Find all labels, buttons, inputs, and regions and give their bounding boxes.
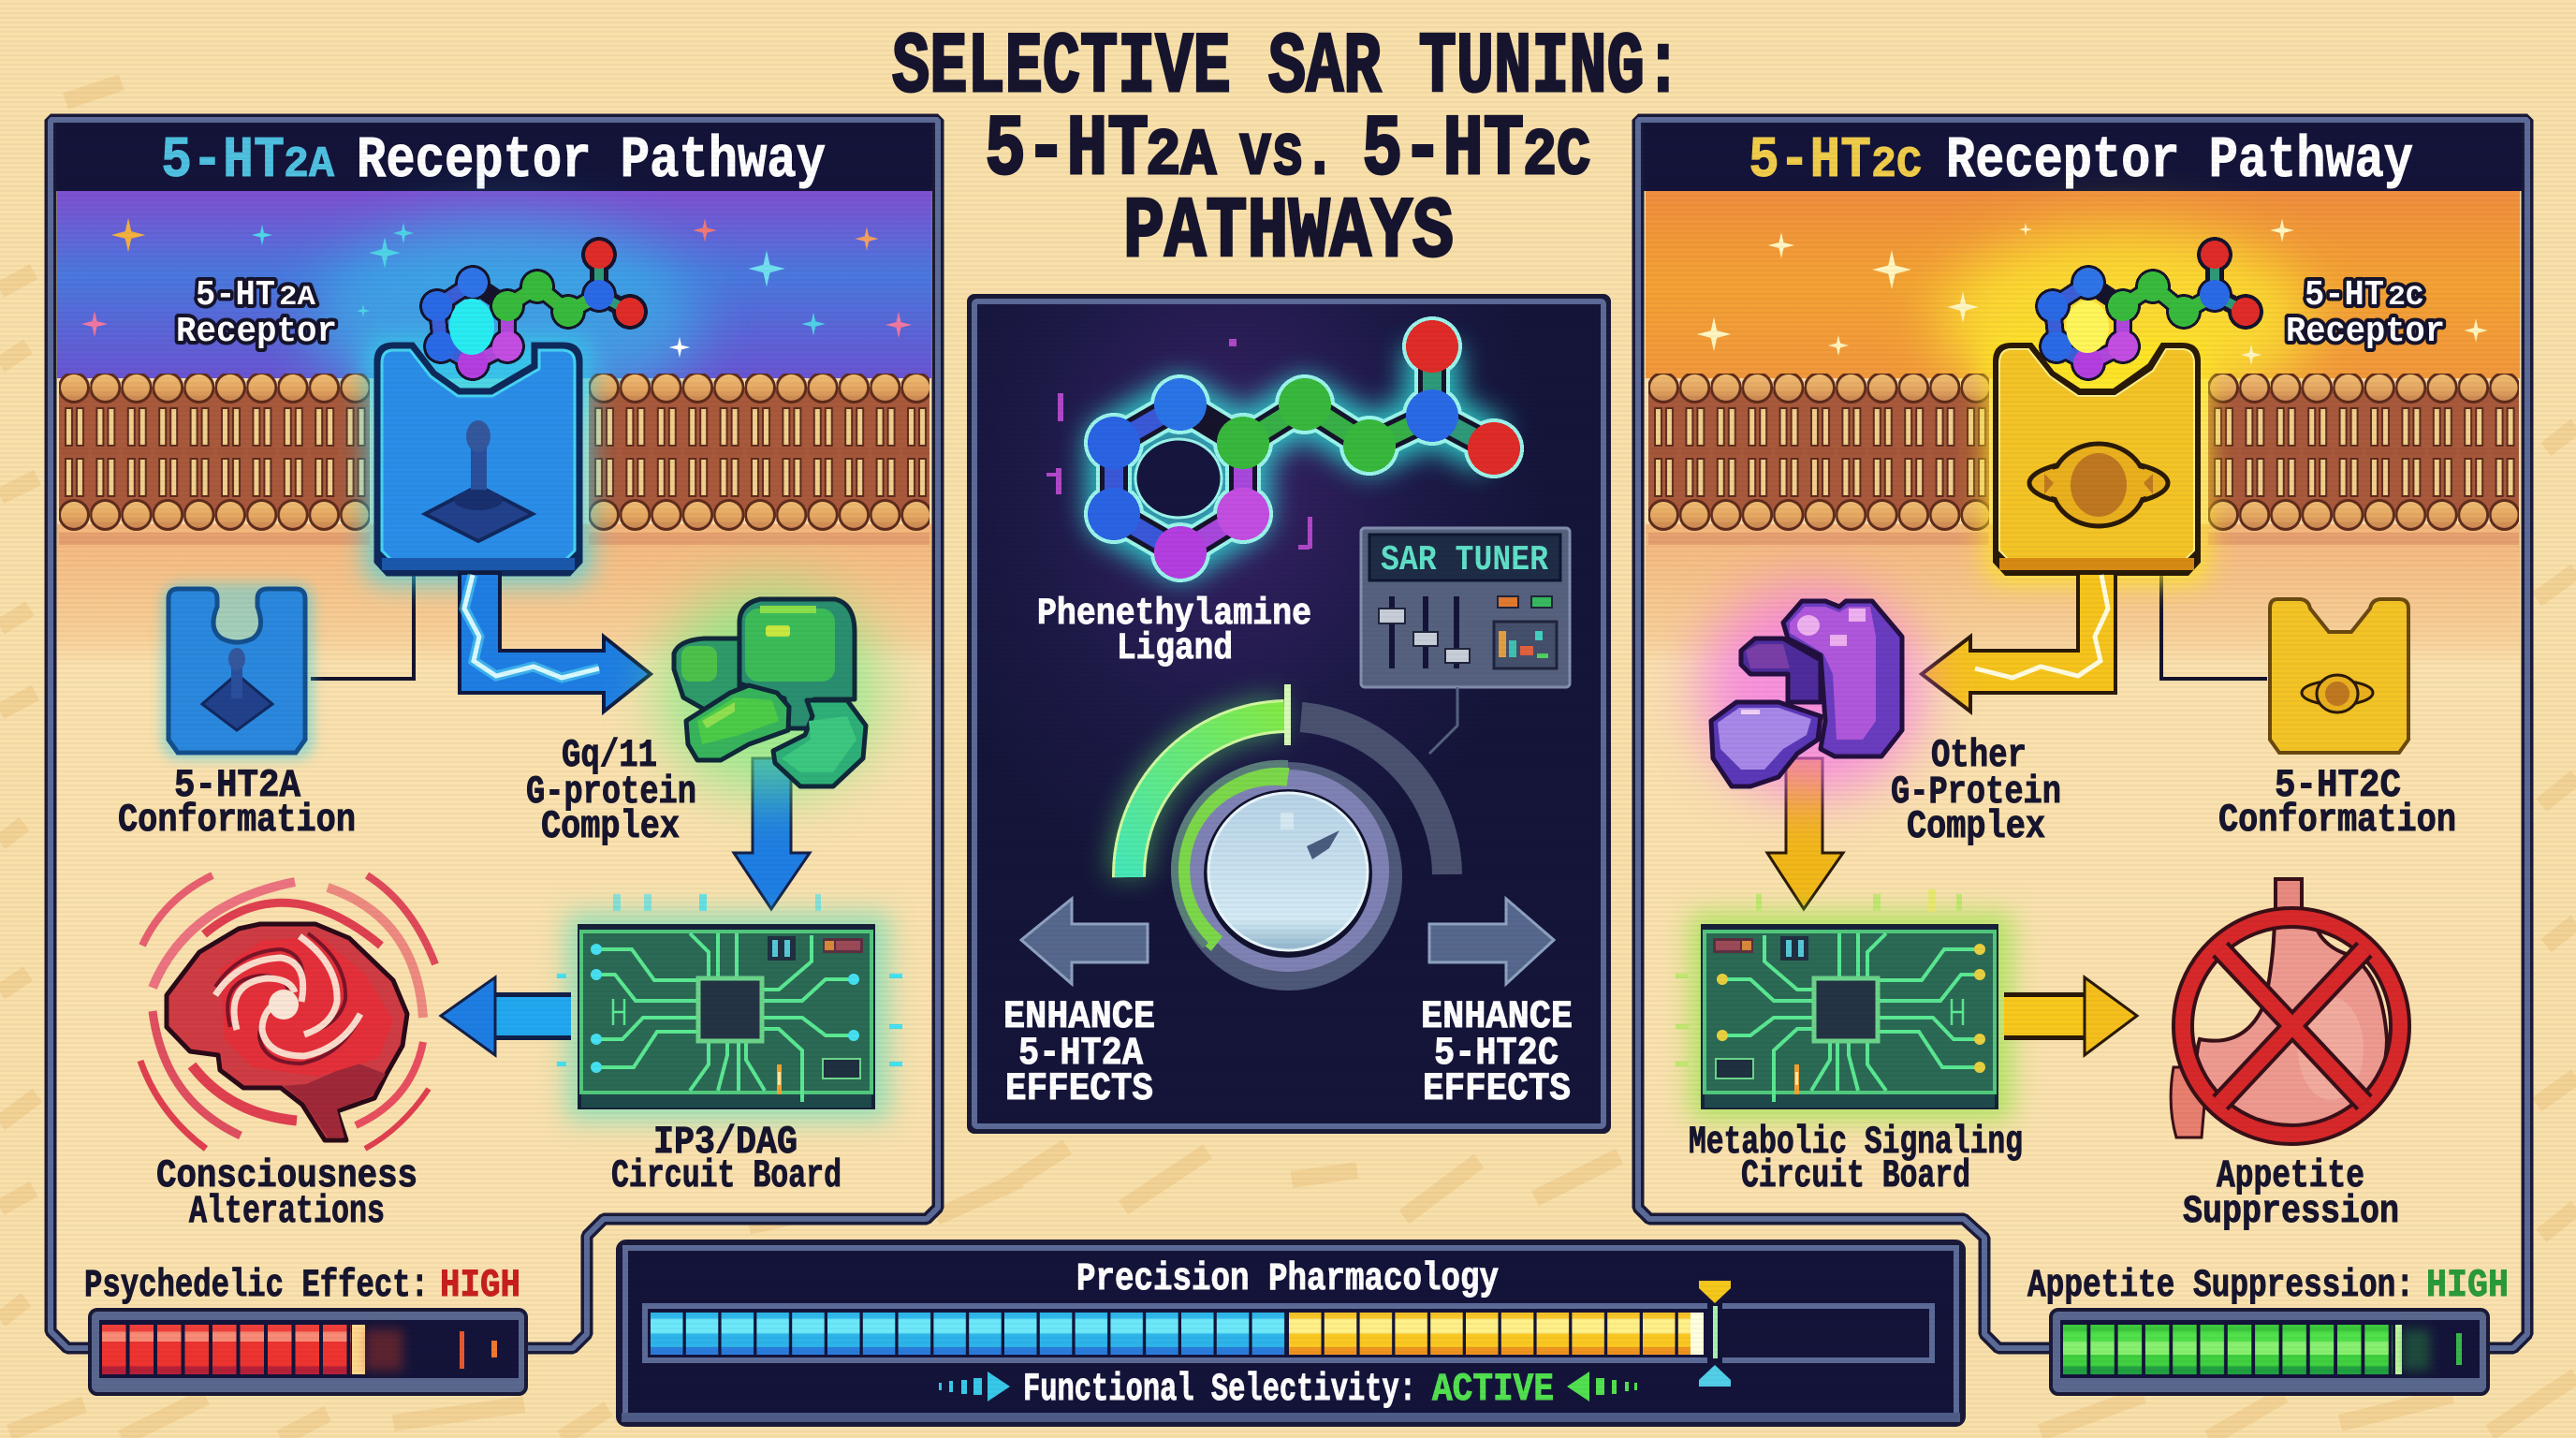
label: G-protein	[1891, 733, 2061, 849]
label: functional selectivity: Functional Selectivity:	[1023, 1367, 1416, 1412]
label: G-protein	[526, 733, 696, 849]
title: PATHWAYS	[1123, 183, 1454, 282]
arrow: down to circuit board	[734, 758, 810, 909]
arrow: enhance 5-HT2A	[1021, 899, 1148, 984]
label: consciousness: Consciousness	[156, 1153, 417, 1198]
label: circuit board: IP3/DAG	[653, 1120, 798, 1165]
panel: precision pharmacology	[619, 1242, 1963, 1424]
receptor with joystick	[376, 345, 580, 574]
receptor label: 5-HT	[2305, 275, 2384, 315]
cerebellum	[284, 1063, 386, 1137]
connector line from tuner	[1429, 687, 1457, 754]
sky background	[1646, 191, 2520, 378]
label: enhance 5-HT2C effects	[1421, 994, 1573, 1111]
metabolic circuit board	[1676, 889, 2012, 1121]
header bar: 5-HT	[161, 127, 285, 194]
label: functional selectivity: ACTIVE	[1432, 1367, 1554, 1412]
receptor with ornament	[1995, 345, 2199, 574]
panel frame	[1638, 120, 2527, 1348]
label: appetite: Suppression	[2183, 1189, 2399, 1234]
label: appetite suppression level: Appetite Suppression:	[2027, 1263, 2414, 1308]
ligand glow	[309, 220, 702, 426]
tuning arc	[1129, 684, 1447, 877]
label: enhance 5-HT2C effects: 5-HT2C	[1434, 1031, 1559, 1076]
frame	[619, 1242, 1963, 1424]
receptor label: 5-HT	[196, 275, 275, 315]
arrow: lightning to G-protein	[460, 573, 651, 712]
heading: Precision Pharmacology	[1076, 1256, 1499, 1301]
receptor label	[2286, 275, 2445, 352]
connector line to conformation	[2161, 573, 2267, 679]
arrow: down to circuit board	[1767, 758, 1843, 909]
label: consciousness: Alterations	[189, 1189, 385, 1234]
header bar: Receptor Pathway	[1946, 127, 2413, 194]
label: appetite: Appetite	[2217, 1153, 2364, 1198]
connector line to conformation	[311, 573, 414, 679]
gauge: psychedelic effect	[90, 1310, 526, 1394]
label: circuit board	[1689, 1120, 2023, 1198]
label: conformation	[118, 763, 356, 843]
G-protein complex	[659, 586, 880, 796]
peach cytoplasm band	[1646, 524, 2520, 665]
selectivity bar	[645, 1306, 1932, 1360]
label: phenethylamine ligand: Phenethylamine	[1037, 594, 1311, 636]
label: G-protein: G-protein	[526, 770, 696, 814]
label: conformation	[2218, 763, 2456, 843]
icon: gold ornament	[2029, 444, 2168, 526]
label: enhance 5-HT2C effects: EFFECTS	[1423, 1066, 1571, 1111]
icon: brain with swirl	[140, 875, 435, 1149]
label: enhance 5-HT2A effects: EFFECTS	[1005, 1066, 1153, 1111]
ligand in pocket	[419, 237, 648, 381]
receptor label: Receptor	[2286, 312, 2445, 352]
icon: crossed out stomach	[2171, 879, 2400, 1137]
label: G-protein: Gq/11	[562, 733, 657, 778]
header bar	[56, 123, 932, 194]
panel frame	[51, 120, 938, 1348]
tuning knob	[1174, 762, 1402, 990]
panel: selective SAR tuner	[971, 298, 1607, 1130]
receptor label	[176, 275, 337, 352]
header bar	[1644, 123, 2522, 194]
receptor label: 2A	[279, 282, 315, 314]
label: appetite	[2183, 1153, 2399, 1234]
label: enhance 5-HT2A effects: ENHANCE	[1003, 994, 1155, 1039]
ligand glow	[1938, 229, 2312, 417]
icon: joystick	[425, 420, 533, 541]
panel frame	[971, 298, 1607, 1130]
label: psychedelic effect: HIGH	[440, 1263, 520, 1308]
selectivity marker	[1699, 1281, 1731, 1387]
label: phenethylamine ligand: Ligand	[1117, 628, 1233, 670]
header bar: 2C	[1871, 140, 1922, 189]
arrow: to brain	[441, 977, 571, 1055]
SAR tuner device	[1361, 528, 1570, 687]
label: enhance 5-HT2C effects: ENHANCE	[1421, 994, 1573, 1039]
ligand in pocket	[2035, 237, 2263, 381]
stars	[1697, 218, 2488, 365]
label: G-protein: Complex	[541, 804, 680, 849]
title	[892, 19, 1682, 282]
label: appetite suppression level: HIGH	[2426, 1263, 2509, 1308]
label: G-protein: G-Protein	[1891, 770, 2061, 814]
gauge: appetite suppression	[2051, 1310, 2488, 1394]
conformation icon	[161, 582, 315, 760]
label: circuit board	[611, 1120, 842, 1198]
header bar: 2A	[284, 140, 334, 189]
label: psychedelic effect: Psychedelic Effect:	[84, 1263, 429, 1308]
circuit board IP3/DAG	[557, 894, 902, 1121]
title: 2A	[1146, 120, 1216, 194]
label: conformation: Conformation	[118, 798, 356, 843]
cell membrane	[59, 374, 929, 545]
label: circuit board: Metabolic Signaling	[1689, 1120, 2023, 1165]
arrow: lightning to G-protein	[1922, 573, 2115, 712]
label: conformation: 5-HT2C	[2275, 763, 2401, 808]
title: 5-HT	[985, 101, 1149, 199]
receptor glow	[365, 337, 592, 584]
panel: 5-HT2C receptor pathway	[1638, 120, 2527, 1394]
title: 2C	[1523, 120, 1590, 194]
label: conformation: 5-HT2A	[174, 763, 301, 808]
label: enhance 5-HT2A effects: 5-HT2A	[1018, 1031, 1144, 1076]
title: SELECTIVE SAR TUNING:	[892, 19, 1682, 117]
header bar: 5-HT	[1749, 127, 1871, 194]
phenethylamine ligand	[1046, 316, 1524, 582]
conformation icon	[2270, 599, 2408, 753]
receptor label: 2C	[2388, 282, 2423, 314]
label: enhance 5-HT2A effects	[1003, 994, 1155, 1111]
receptor label: Receptor	[176, 312, 337, 352]
stars	[81, 218, 912, 358]
label: circuit board: Circuit Board	[1741, 1153, 1970, 1198]
sliders	[1379, 596, 1470, 668]
label: G-protein: Complex	[1907, 804, 2045, 849]
label: conformation: Conformation	[2218, 798, 2456, 843]
title: 5-HT	[1362, 101, 1524, 199]
SAR tuner device: SAR TUNER	[1381, 540, 1548, 580]
arrow: enhance 5-HT2C	[1429, 899, 1554, 984]
label: circuit board: Circuit Board	[611, 1153, 842, 1198]
title: vs.	[1239, 113, 1336, 196]
label: G-protein: Other	[1931, 733, 2027, 778]
panel: 5-HT2A receptor pathway	[51, 120, 938, 1394]
arrow: to appetite	[2004, 977, 2137, 1055]
peach cytoplasm band	[57, 524, 931, 665]
purple G-protein complex	[1699, 586, 1924, 796]
label: consciousness	[156, 1153, 417, 1234]
header bar: Receptor Pathway	[357, 127, 826, 194]
cell membrane	[1648, 374, 2519, 545]
sky background	[57, 191, 931, 378]
label: phenethylamine ligand	[1037, 594, 1311, 670]
receptor glow	[1984, 337, 2209, 584]
